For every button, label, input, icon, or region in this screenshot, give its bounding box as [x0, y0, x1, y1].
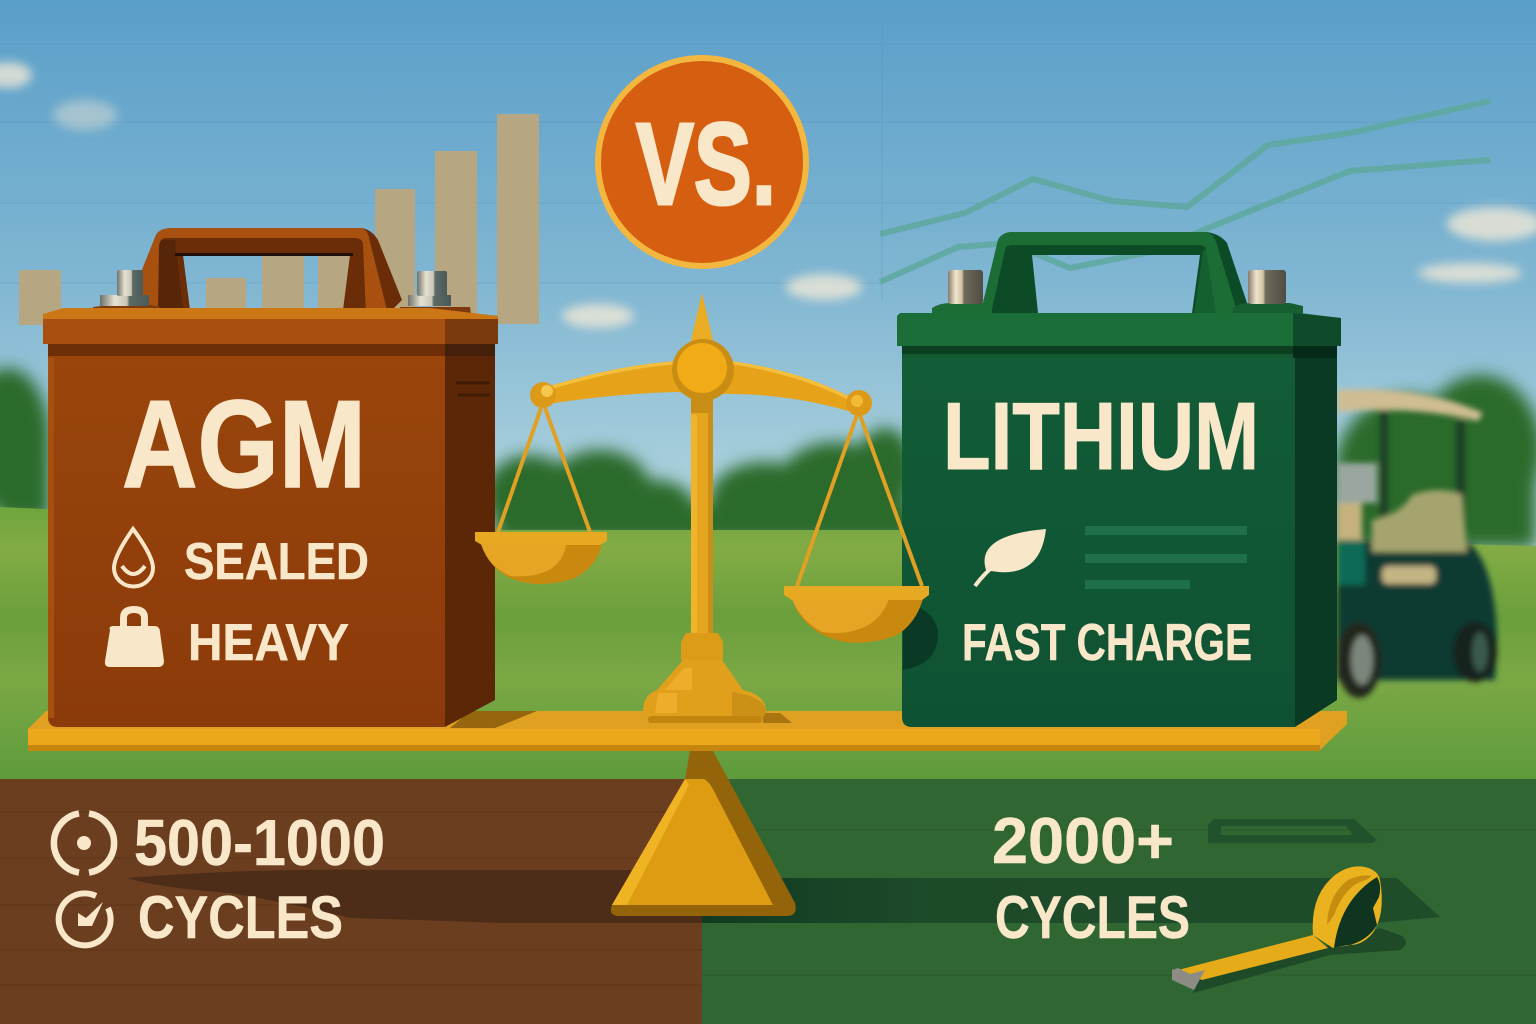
Lithium title: LITHIUM	[943, 383, 1259, 490]
background: tan bar chart	[19, 114, 539, 328]
AGM shadow	[127, 870, 702, 923]
platform	[28, 711, 1347, 751]
AGM handle	[142, 228, 402, 314]
left chain	[498, 408, 590, 532]
balance scale	[475, 293, 929, 723]
scale beam	[530, 361, 872, 416]
shadow outline	[1208, 819, 1377, 843]
background: grass field	[0, 507, 1536, 785]
AGM terminals	[93, 270, 471, 315]
fulcrum	[611, 751, 796, 916]
hub	[672, 339, 734, 401]
sealed label: SEALED	[184, 533, 369, 591]
shadow band	[702, 878, 1440, 923]
fast charge label: FAST CHARGE	[962, 614, 1252, 672]
pointer	[690, 293, 714, 345]
Lithium cycles label: CYCLES	[995, 884, 1190, 951]
tape hook	[1172, 968, 1205, 990]
panel: Lithium lower band	[702, 779, 1536, 1024]
tape recess	[1327, 876, 1372, 925]
left pan	[475, 532, 607, 584]
Lithium handle	[983, 232, 1247, 314]
scale base	[643, 633, 766, 723]
Lithium stats	[992, 804, 1190, 951]
icon: droplet	[114, 529, 153, 586]
background: tree line	[0, 368, 1536, 548]
tape shadow	[1193, 928, 1406, 993]
Lithium body	[902, 358, 1337, 727]
AGM lid	[43, 308, 498, 358]
VS text: VS.	[636, 99, 776, 229]
AGM title: AGM	[122, 376, 366, 514]
right pan	[784, 586, 929, 643]
Lithium terminals	[932, 270, 1303, 314]
AGM cycles label: CYCLES	[138, 884, 343, 951]
icon: tape measure	[1172, 866, 1406, 993]
golf cart	[1337, 389, 1497, 698]
AGM cycles number: 500-1000	[134, 806, 385, 879]
background: clouds	[0, 62, 1536, 328]
icon: gauge check	[59, 893, 111, 945]
tape housing	[1313, 866, 1382, 948]
heavy label: HEAVY	[188, 614, 349, 672]
icon: cycle ring	[54, 813, 114, 873]
panel: AGM lower band	[0, 779, 702, 1024]
scale pillar	[691, 395, 713, 635]
AGM battery	[43, 228, 498, 727]
background: teal line chart	[880, 101, 1490, 282]
Lithium battery	[897, 232, 1341, 727]
Lithium cycles number: 2000+	[992, 804, 1174, 877]
tape face	[1334, 877, 1380, 948]
icon: leaf	[975, 529, 1046, 586]
background: sky	[0, 0, 1536, 560]
right chain	[797, 415, 922, 586]
Lithium lid	[897, 313, 1341, 360]
AGM stats	[54, 806, 385, 951]
decorative text lines	[1085, 526, 1247, 589]
VS badge	[598, 58, 806, 266]
AGM body	[48, 356, 495, 727]
icon: weight	[105, 606, 164, 667]
tape blade	[1178, 935, 1328, 980]
